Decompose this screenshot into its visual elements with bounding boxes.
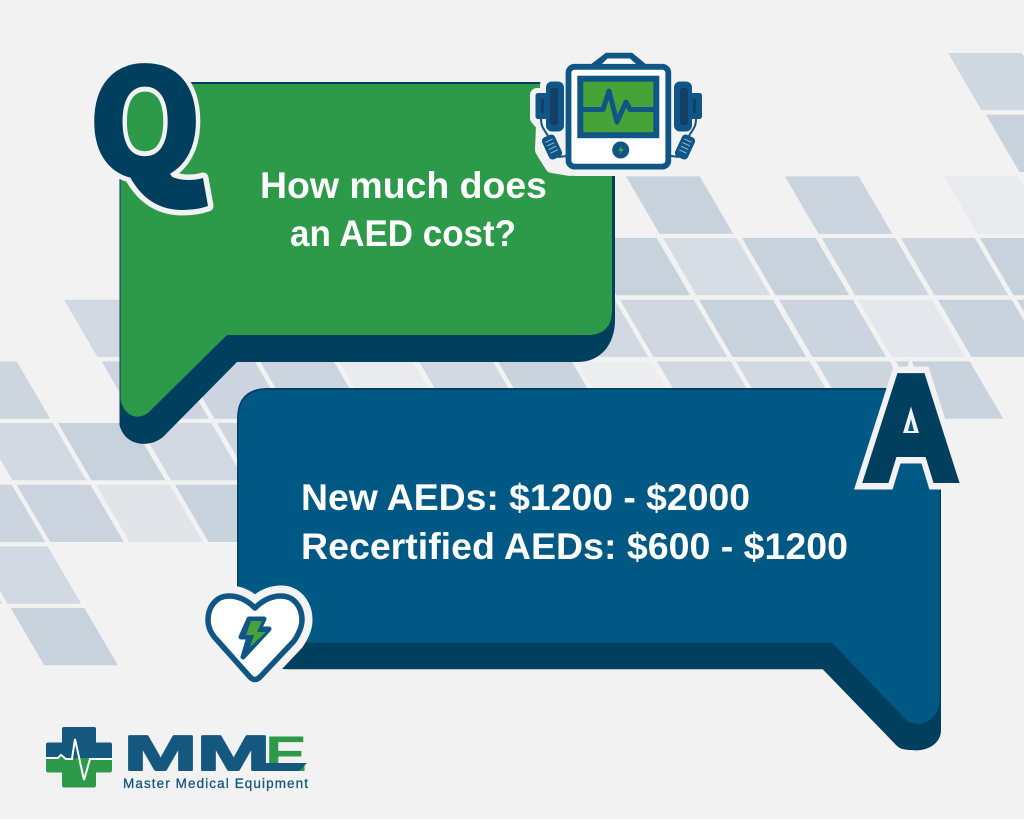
answer text xyxy=(301,477,848,567)
panel: question speech bubble xyxy=(119,82,615,444)
device button xyxy=(612,142,629,158)
question text: an AED cost? xyxy=(290,213,516,254)
letter A badge: A xyxy=(864,346,958,511)
device handle xyxy=(592,53,645,64)
question text xyxy=(260,165,547,254)
background tile pattern xyxy=(0,53,1024,665)
logo wordmark xyxy=(124,726,307,782)
icon: heart with lightning bolt xyxy=(208,596,302,680)
icon halo xyxy=(537,66,700,169)
logo tagline: Master Medical Equipment xyxy=(123,776,308,791)
panel: answer speech bubble xyxy=(237,388,950,750)
logo: Master Medical Equipment xyxy=(46,726,308,791)
logo wordmark: MM xyxy=(124,727,270,781)
left paddle xyxy=(536,82,567,161)
letter A badge: A xyxy=(864,346,958,511)
logo wordmark: E xyxy=(265,726,307,782)
logo cross xyxy=(46,727,112,788)
question text: How much does xyxy=(260,165,547,206)
answer text: New AEDs: $1200 - $2000 xyxy=(301,477,750,518)
lightning bolt xyxy=(241,619,269,657)
device screen xyxy=(580,79,656,135)
letter Q badge: Q xyxy=(89,38,201,212)
answer text: Recertified AEDs: $600 - $1200 xyxy=(301,526,848,567)
icon: defibrillator device xyxy=(536,53,702,169)
right paddle xyxy=(671,82,702,161)
screen pulse line xyxy=(583,91,654,122)
letter Q badge: Q xyxy=(89,38,201,212)
device body xyxy=(568,67,668,167)
